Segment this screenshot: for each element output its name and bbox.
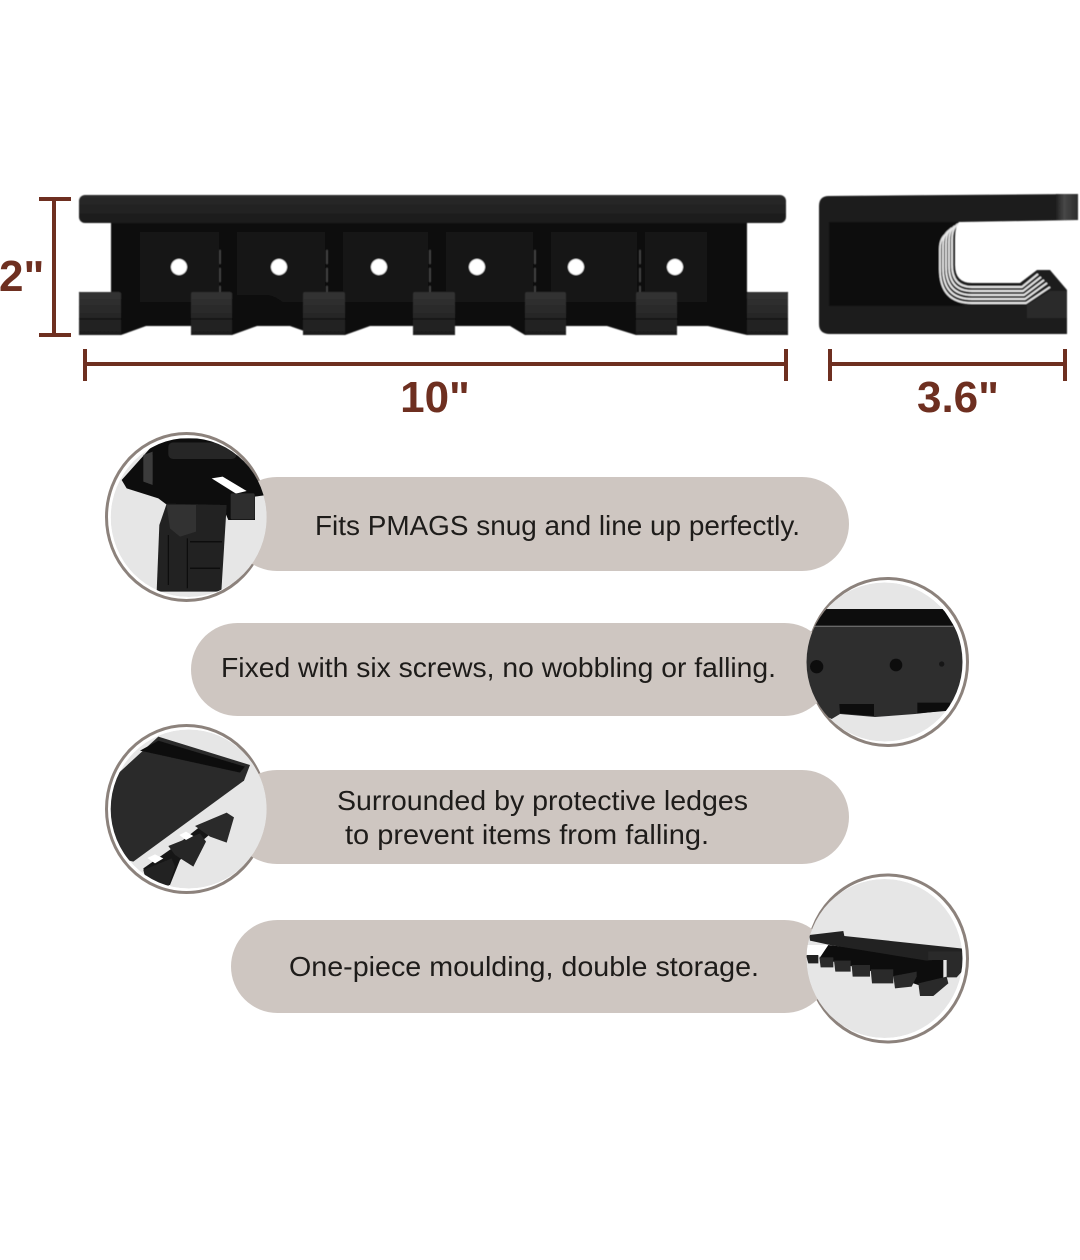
feature 1: snug fit bbox=[106, 434, 849, 600]
photo: one-piece rack bbox=[806, 879, 963, 1038]
caption 3 bbox=[337, 785, 748, 850]
caption 4: One-piece moulding, double storage. bbox=[289, 951, 759, 982]
rack dividers bbox=[220, 250, 640, 292]
rack reflection bbox=[216, 295, 307, 332]
caption 1: Fits PMAGS snug and line up perfectly. bbox=[315, 510, 800, 541]
circle frame 4 bbox=[808, 875, 968, 1042]
rack body bbox=[79, 220, 788, 335]
pill 1 bbox=[230, 477, 849, 571]
side view recess bbox=[829, 222, 965, 306]
caption 3: Surrounded by protective ledges bbox=[337, 785, 748, 816]
rack back panels bbox=[140, 232, 707, 302]
circle frame 2 bbox=[808, 578, 968, 746]
side view foot bbox=[1027, 291, 1067, 318]
rack feet bbox=[79, 292, 788, 335]
circle frame 1 bbox=[106, 434, 266, 600]
photo: rear screws bbox=[800, 582, 967, 742]
rack top shelf bbox=[79, 195, 786, 223]
circle frame 3 bbox=[106, 726, 266, 892]
caption 3: to prevent items from falling. bbox=[345, 819, 709, 850]
feature 2: six screws bbox=[191, 578, 968, 746]
side view end cap bbox=[1055, 194, 1078, 220]
pill 2 bbox=[191, 623, 831, 716]
photo: magazine in rack bbox=[111, 438, 267, 597]
dimension: height 2 inches: 2" bbox=[0, 252, 44, 301]
feature 3: protective ledges bbox=[100, 726, 849, 892]
pill 3 bbox=[230, 770, 849, 864]
side view fins bbox=[940, 224, 1050, 303]
pill 4 bbox=[231, 920, 831, 1013]
feature 4: double storage bbox=[231, 875, 968, 1042]
rack screw holes bbox=[171, 259, 683, 275]
dimension: depth 3.6 inches bbox=[830, 349, 1065, 422]
dimension: depth 3.6 inches: 3.6" bbox=[917, 373, 999, 422]
dimension: length 10 inches bbox=[85, 349, 786, 422]
dimension: height 2 inches bbox=[0, 199, 71, 335]
dimension: length 10 inches: 10" bbox=[400, 373, 470, 422]
product: rack side view bbox=[819, 194, 1078, 334]
caption 2: Fixed with six screws, no wobbling or falling. bbox=[221, 652, 776, 683]
product: rack front view bbox=[79, 195, 788, 335]
photo: shelf ledge bbox=[100, 730, 267, 888]
